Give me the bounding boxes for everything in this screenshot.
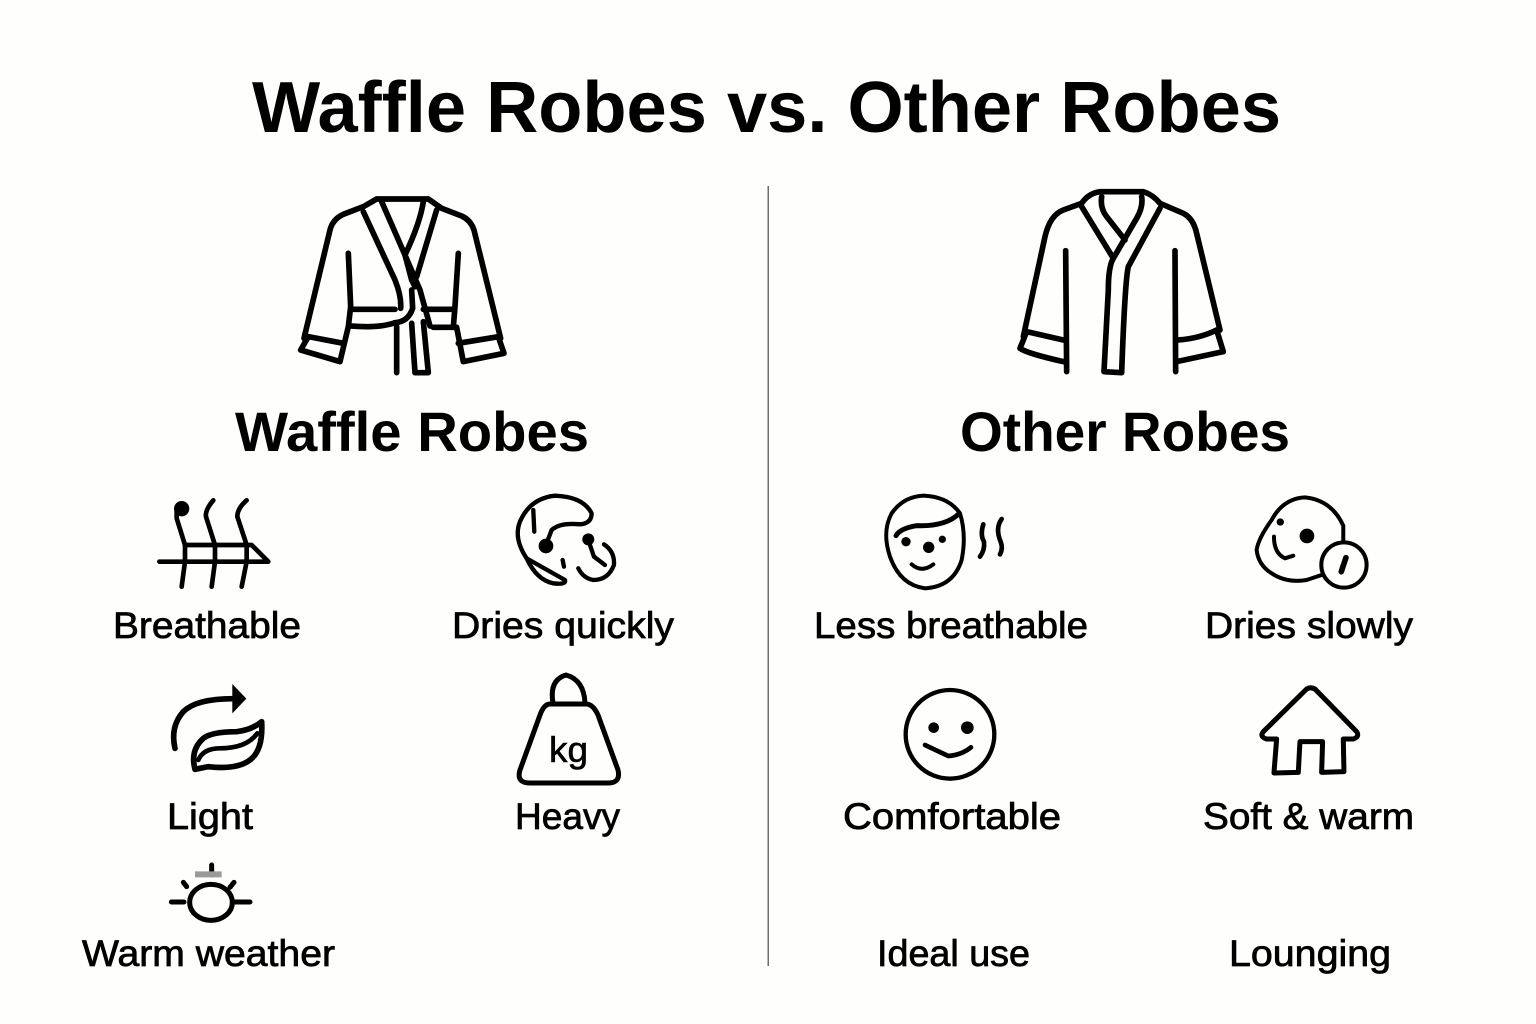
- label: Warm weather: [82, 933, 335, 974]
- icon: breathable fabric with vapor: [159, 500, 268, 587]
- feature: comfortable: [843, 690, 1061, 837]
- feature: dries slowly: [1205, 497, 1414, 646]
- label: Less breathable: [814, 605, 1088, 646]
- title: Waffle Robes vs. Other Robes: [252, 68, 1281, 148]
- divider between columns: [768, 186, 769, 966]
- panel: waffle robes: [82, 199, 675, 974]
- heading: other robes: Other Robes: [960, 400, 1290, 463]
- feature: heavy: [515, 675, 620, 837]
- icon: smiley: [906, 690, 994, 779]
- feature: dries quickly: [452, 496, 675, 646]
- feature: soft and warm: [1203, 688, 1414, 837]
- label: lounging: Lounging: [1229, 933, 1391, 974]
- icon: kg weight: kg: [549, 729, 588, 770]
- label: Dries slowly: [1205, 605, 1414, 646]
- label: Soft & warm: [1203, 796, 1414, 837]
- icon: house: [1262, 688, 1358, 773]
- label: Dries quickly: [452, 605, 675, 646]
- icon: sweaty face: [886, 496, 1002, 588]
- panel: other robes: [814, 192, 1414, 974]
- icon: sun: [171, 865, 250, 920]
- icon: waffle robe: [301, 199, 504, 373]
- label: Breathable: [113, 605, 301, 646]
- feature: light: [167, 684, 262, 837]
- label: ideal use: Ideal use: [877, 933, 1030, 974]
- icon: drying swirl: [518, 496, 614, 584]
- icon: arrow and leaf: [174, 684, 262, 769]
- icon: other robe: [1020, 192, 1223, 373]
- label: Comfortable: [843, 796, 1061, 837]
- feature: less breathable: [814, 496, 1088, 646]
- feature: breathable: [113, 500, 301, 646]
- feature: warm weather: [82, 865, 335, 974]
- heading: waffle robes: Waffle Robes: [235, 400, 589, 463]
- icon: face with clock: [1257, 497, 1367, 588]
- label: Heavy: [515, 796, 620, 837]
- label: Light: [167, 796, 254, 837]
- icon: kg weight: [519, 675, 619, 783]
